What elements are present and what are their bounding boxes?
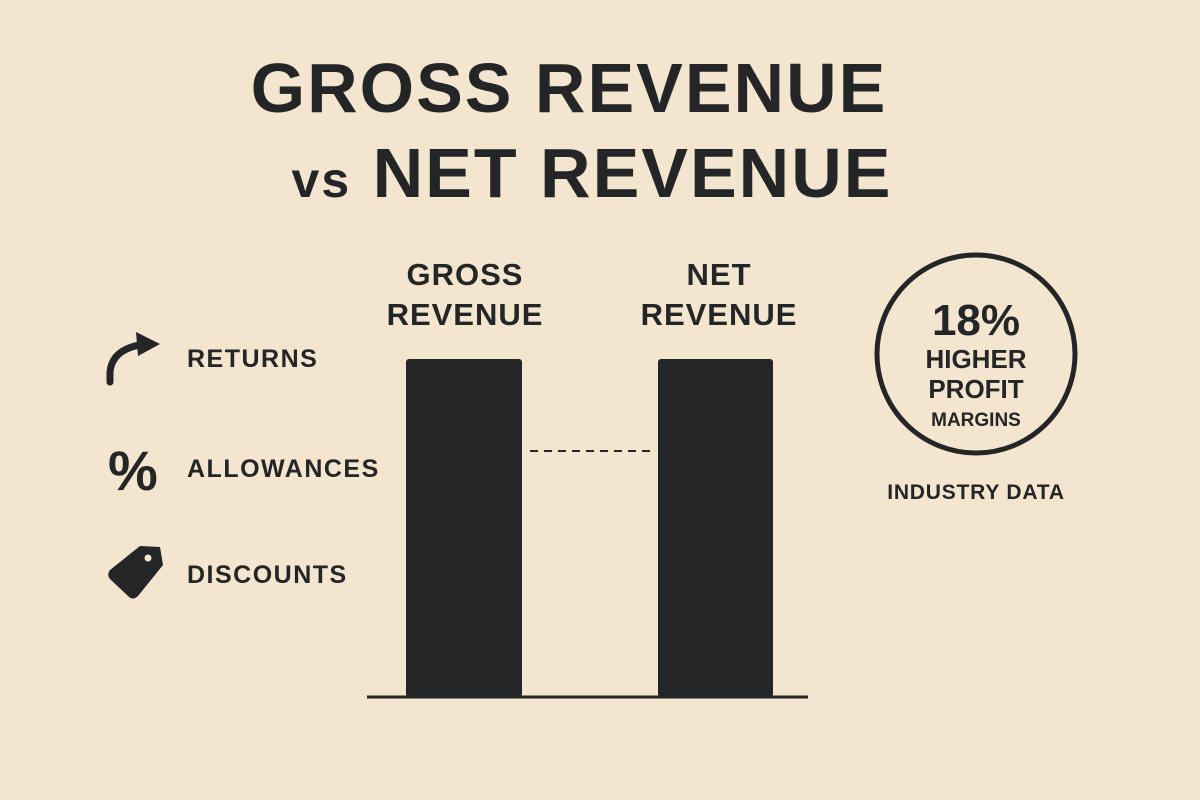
icon: return arrow [110,332,160,382]
bar: net revenue [658,359,773,697]
label: net revenue [641,257,797,332]
label: gross revenue [387,257,543,332]
callout: 18% higher profit margins: PROFIT [928,374,1024,404]
baseline [367,696,808,698]
callout: 18% higher profit margins: HIGHER [925,344,1027,374]
dashed connector [530,450,655,452]
icon: percent: % [108,439,158,502]
text: returns: RETURNS [187,345,318,373]
icon: price tag [108,546,163,598]
source note: INDUSTRY DATA [887,481,1065,504]
callout: 18% higher profit margins [877,255,1075,453]
callout: 18% higher profit margins: 18% [932,296,1020,345]
bar: gross revenue [406,359,522,697]
title [251,49,892,212]
callout: 18% higher profit margins: MARGINS [931,410,1021,431]
label: net revenue: REVENUE [641,297,797,332]
label: gross revenue: GROSS [407,257,523,292]
label: gross revenue: REVENUE [387,297,543,332]
title: GROSS REVENUE [251,49,887,127]
bar chart [367,359,808,697]
title: vs NET REVENUE [292,134,892,212]
deductions list [108,332,380,598]
label: net revenue: NET [686,257,752,292]
text: allowances: ALLOWANCES [187,455,380,483]
text: discounts: DISCOUNTS [187,561,348,589]
